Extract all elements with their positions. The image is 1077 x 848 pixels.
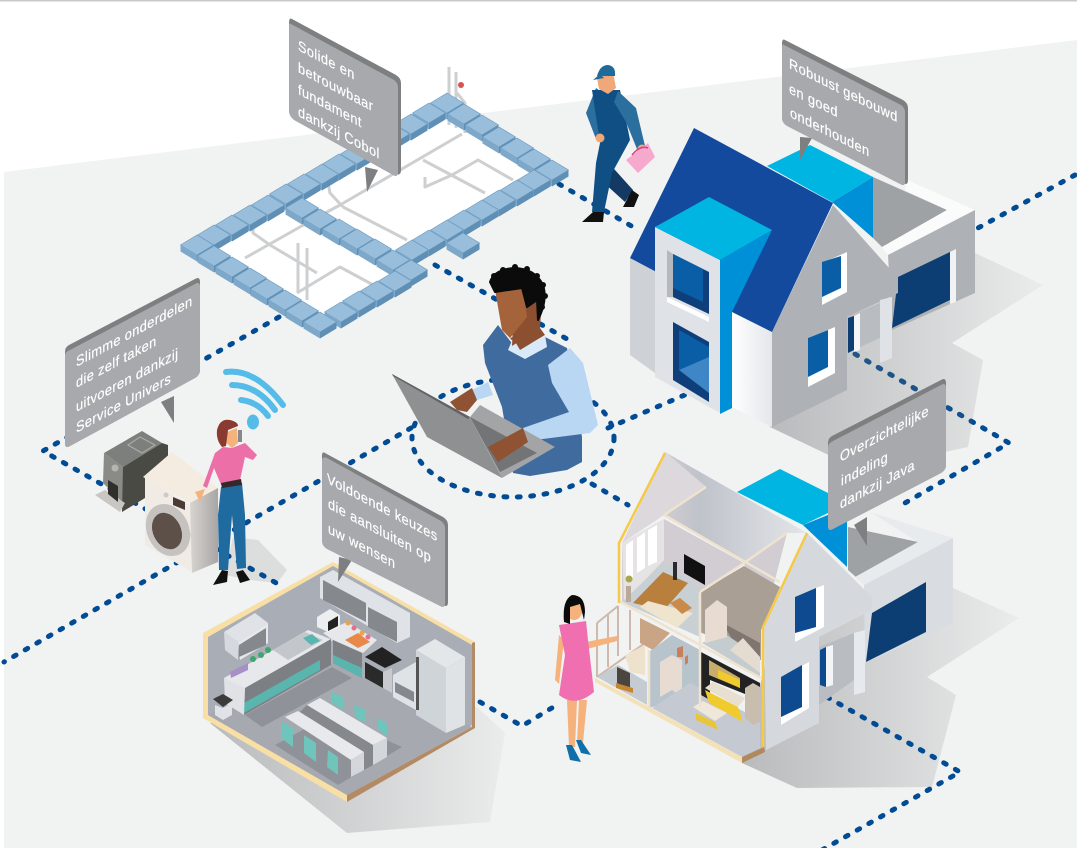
callout text: onderhouden bbox=[790, 105, 870, 161]
worker with toolbox bbox=[582, 65, 655, 222]
callout text: Voldoende keuzes bbox=[327, 471, 438, 546]
dotted routes bbox=[4, 317, 960, 848]
yellow section edges bbox=[619, 453, 807, 747]
callout text: Robuust gebouwd bbox=[789, 56, 898, 126]
interior bbox=[597, 452, 807, 757]
callout: slimme onderdelen bbox=[65, 278, 200, 447]
callout text: Overzichtelijke bbox=[840, 403, 929, 466]
woman with phone bbox=[195, 420, 257, 585]
callout text: dankzij Cobol bbox=[298, 104, 380, 163]
callout: voldoende keuzes bbox=[322, 452, 448, 607]
callout text: die zelf taken bbox=[76, 333, 157, 392]
shadow: main house bbox=[770, 253, 1043, 470]
callout text: Service Univers bbox=[76, 371, 171, 437]
woman in pink dress bbox=[555, 595, 617, 762]
callout: solide en betrouwbaar fundament bbox=[289, 18, 401, 192]
callout text bbox=[76, 293, 193, 437]
main house bbox=[630, 128, 975, 427]
callout text bbox=[789, 56, 898, 161]
callout: robuust gebouwd bbox=[782, 40, 908, 185]
callout text: Solide en bbox=[298, 38, 355, 84]
foundation with pipes bbox=[180, 67, 568, 338]
kitchen bbox=[203, 562, 475, 802]
callout text bbox=[840, 403, 929, 513]
wifi dot bbox=[247, 414, 259, 430]
callout text: dankzij Java bbox=[840, 457, 915, 513]
callout: overzichtelijke indeling bbox=[828, 379, 946, 546]
shadow: cutaway house bbox=[742, 588, 1019, 788]
man with laptop bbox=[392, 264, 598, 478]
callout text: die aansluiten op bbox=[328, 496, 431, 567]
washing machine bbox=[138, 452, 218, 573]
floor edge bbox=[595, 678, 742, 763]
cutaway house bbox=[595, 452, 953, 763]
wifi icon bbox=[226, 372, 283, 416]
callout text: uitvoeren dankzij bbox=[76, 346, 178, 416]
callout text: Slimme onderdelen bbox=[76, 293, 193, 371]
beams bbox=[619, 487, 787, 708]
callout text: en goed bbox=[789, 81, 838, 121]
callout text: uw wensen bbox=[328, 521, 395, 573]
dotted route behind house shadow bbox=[435, 175, 1075, 507]
pipes bbox=[245, 67, 513, 300]
shadow: woman with phone bbox=[225, 537, 287, 583]
callout text: indeling bbox=[841, 449, 888, 490]
coffee machine bbox=[95, 431, 168, 512]
shadow: kitchen bbox=[210, 700, 505, 833]
callout text: betrouwbaar bbox=[298, 60, 373, 116]
callout text bbox=[298, 38, 380, 163]
callout text: fundament bbox=[298, 82, 362, 132]
foundation blocks bbox=[180, 93, 568, 338]
